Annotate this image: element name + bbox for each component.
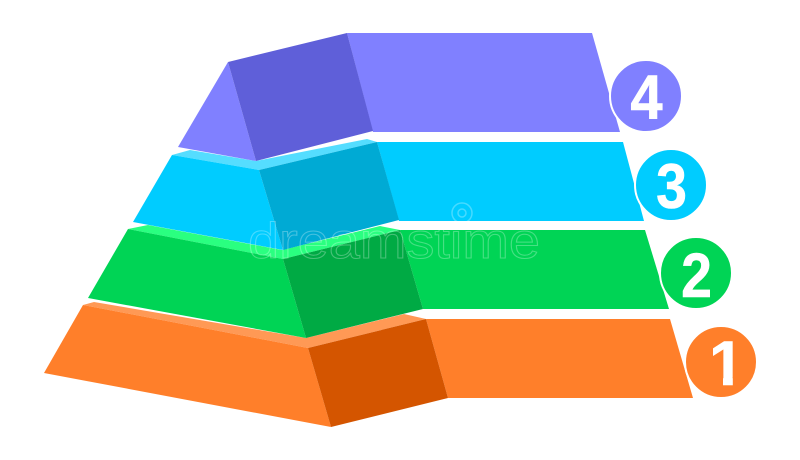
badge: number 2: [660, 237, 732, 311]
badge: number 3: [635, 149, 707, 222]
level 1: orange tier: [44, 302, 693, 427]
badge: number 1: [685, 326, 757, 399]
level 3: blue tier: [133, 139, 644, 250]
badge: number 3: 3: [656, 151, 687, 222]
level 2: green tier: [88, 225, 669, 338]
watermark: dreamstime: [248, 213, 540, 269]
level 4: purple tier: [178, 33, 620, 161]
badge: number 4: 4: [630, 62, 663, 133]
badge: number 4: [610, 60, 682, 133]
badge: number 1: 1: [709, 329, 744, 399]
badge: number 2: 2: [681, 240, 712, 311]
